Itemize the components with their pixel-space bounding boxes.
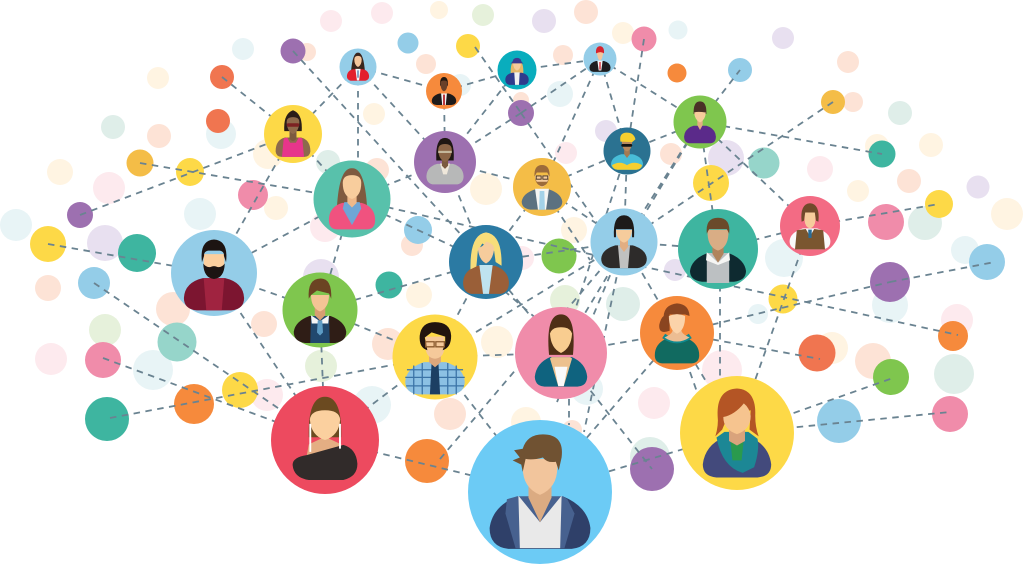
avatar: man with yellow hair and beach shirt	[604, 128, 650, 174]
avatar: man with glasses in checked shirt	[392, 314, 478, 400]
avatar: man in dark coat on green	[282, 272, 358, 348]
avatar: blonde woman in brown jacket	[449, 225, 523, 299]
avatar: woman in teal blazer on pink	[515, 307, 607, 399]
avatar: woman in hat	[498, 50, 536, 90]
avatar: woman with long brown hair	[314, 160, 390, 238]
avatar: large man on blue	[468, 420, 612, 564]
avatar: man in black suit on orange	[426, 73, 462, 109]
avatar: woman in sunglasses	[264, 105, 322, 163]
avatar: man with vest on pink-red	[780, 196, 840, 256]
avatar: woman in red jacket	[340, 48, 376, 86]
avatar: bearded man with glasses	[513, 158, 571, 216]
avatar: man with red hair	[584, 42, 616, 76]
coloured network nodes	[30, 26, 1005, 491]
avatar: red-haired woman on yellow	[680, 376, 794, 490]
avatar: woman with curly hair on orange	[640, 296, 714, 370]
avatar: woman in black top on red	[271, 386, 379, 494]
avatar: woman with black bob on light blue	[590, 208, 658, 276]
avatar: woman with hair bun on green	[674, 96, 726, 148]
avatar: woman in white blouse	[414, 131, 476, 193]
avatar: man in dark coat on teal	[678, 209, 758, 289]
avatar: bearded man in maroon shirt	[171, 230, 257, 316]
dashed connection lines	[48, 39, 995, 492]
